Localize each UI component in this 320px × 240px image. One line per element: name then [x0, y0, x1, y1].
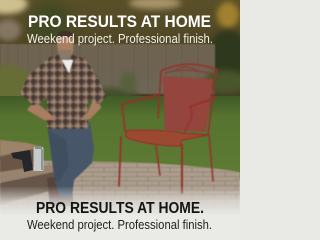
- seat back mesh: [163, 76, 213, 132]
- bottom white fade: [0, 186, 240, 216]
- bottom heading: PRO RESULTS AT HOME.: [36, 200, 204, 217]
- lawn: [0, 96, 240, 180]
- legs: [119, 137, 121, 186]
- shirt: [20, 52, 106, 129]
- back frame: [161, 64, 217, 135]
- jeans: [47, 122, 94, 198]
- top heading: PRO RESULTS AT HOME: [28, 12, 211, 31]
- patio: [0, 160, 240, 215]
- red metal chair: [119, 64, 217, 193]
- trees and evening sky: [0, 0, 248, 100]
- beard: [58, 50, 72, 60]
- hedges: [0, 64, 247, 104]
- undershirt: [62, 60, 73, 73]
- cap: [55, 31, 75, 39]
- face: [56, 34, 74, 60]
- man in plaid shirt: [20, 31, 106, 206]
- fence: [0, 44, 215, 94]
- icon: caulk gun tool: [11, 150, 33, 172]
- bottom subheading: Weekend project. Professional finish.: [27, 218, 212, 232]
- stone steps: [0, 140, 56, 205]
- armrests: [122, 95, 157, 105]
- photo background: backyard: [0, 0, 248, 215]
- top subheading: Weekend project. Professional finish.: [27, 32, 213, 46]
- icon: water bottle: [34, 146, 44, 171]
- seat: [126, 130, 208, 146]
- boots: [47, 176, 74, 206]
- forearms and hands: [27, 104, 56, 120]
